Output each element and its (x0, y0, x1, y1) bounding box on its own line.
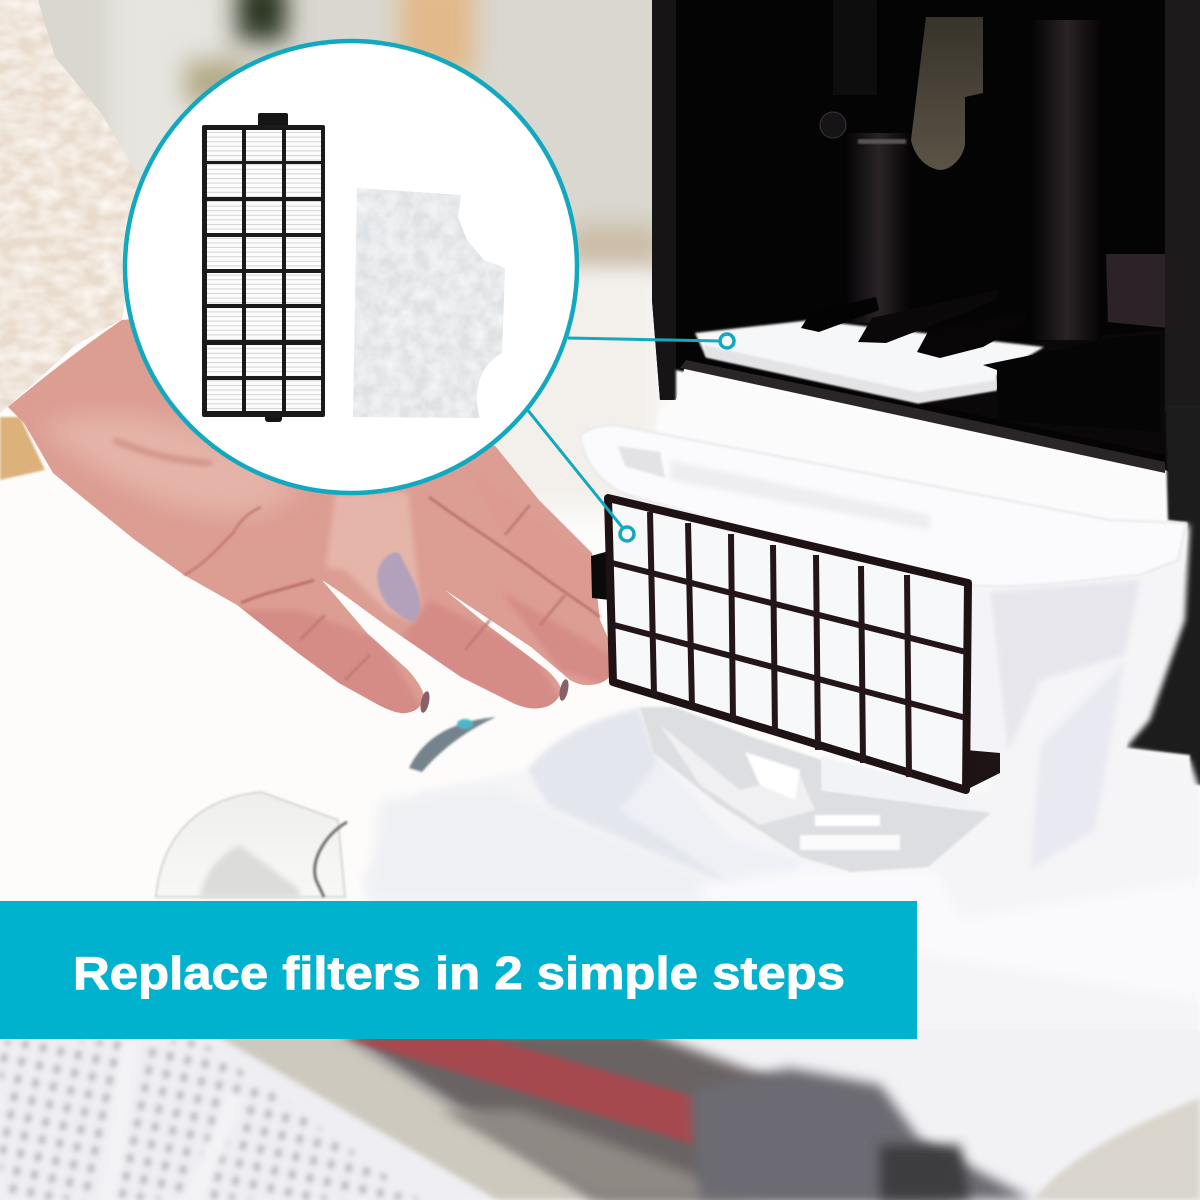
sleeve (0, 0, 139, 413)
beige latch (911, 17, 983, 170)
foam filter (695, 320, 1044, 403)
palm creases (184, 507, 261, 575)
metal block (1106, 254, 1168, 328)
callout connector lines (526, 334, 734, 541)
filter side tab (591, 551, 610, 600)
marker: foam filter (720, 334, 734, 348)
black bracket (983, 335, 1160, 432)
right column (1033, 20, 1101, 340)
blurred clear tube (156, 792, 347, 897)
banner (0, 901, 917, 1039)
chamber sill (680, 360, 1165, 473)
column ring (858, 139, 906, 144)
bottom blurred vacuum (0, 1030, 1200, 1200)
callout circle (125, 41, 577, 493)
prongs (801, 297, 879, 332)
white lid (580, 425, 1186, 586)
white filter side wall (968, 587, 1006, 752)
central column (847, 133, 911, 323)
product HEPA filter (202, 113, 325, 422)
clear dust cup (640, 707, 991, 872)
tube seam (315, 822, 347, 897)
marker: HEPA filter (620, 527, 634, 541)
thumb (326, 492, 420, 622)
fingernails (419, 690, 431, 714)
dark band (337, 1030, 960, 1200)
thumb nail (377, 552, 420, 622)
product foam filter (353, 188, 505, 418)
hand (8, 300, 620, 720)
ribbed tube section (370, 790, 752, 897)
beige band (207, 1030, 600, 1200)
panel above cup (822, 757, 970, 810)
vacuum chamber (652, 0, 1200, 490)
hand shading (40, 415, 620, 720)
right dark frame (1126, 405, 1200, 785)
teal dial (409, 717, 496, 772)
perforated panel (0, 1030, 497, 1200)
sheen upper column (833, 0, 877, 95)
filter frame (608, 498, 968, 790)
lower white vacuum body (360, 523, 1200, 1200)
tan curve (1033, 1098, 1200, 1200)
finger joint creases (300, 505, 565, 680)
upper white housing (640, 370, 1165, 590)
bracelet (0, 417, 45, 480)
knob (820, 112, 846, 138)
red brush stripe (344, 1038, 696, 1145)
grey block (690, 1068, 1033, 1200)
banner text: Replace filters in 2 simple steps (73, 947, 845, 999)
pale strip on band (440, 1110, 760, 1200)
filter corner latch (966, 750, 1000, 790)
main HEPA filter (591, 498, 1000, 790)
basin (528, 708, 760, 897)
